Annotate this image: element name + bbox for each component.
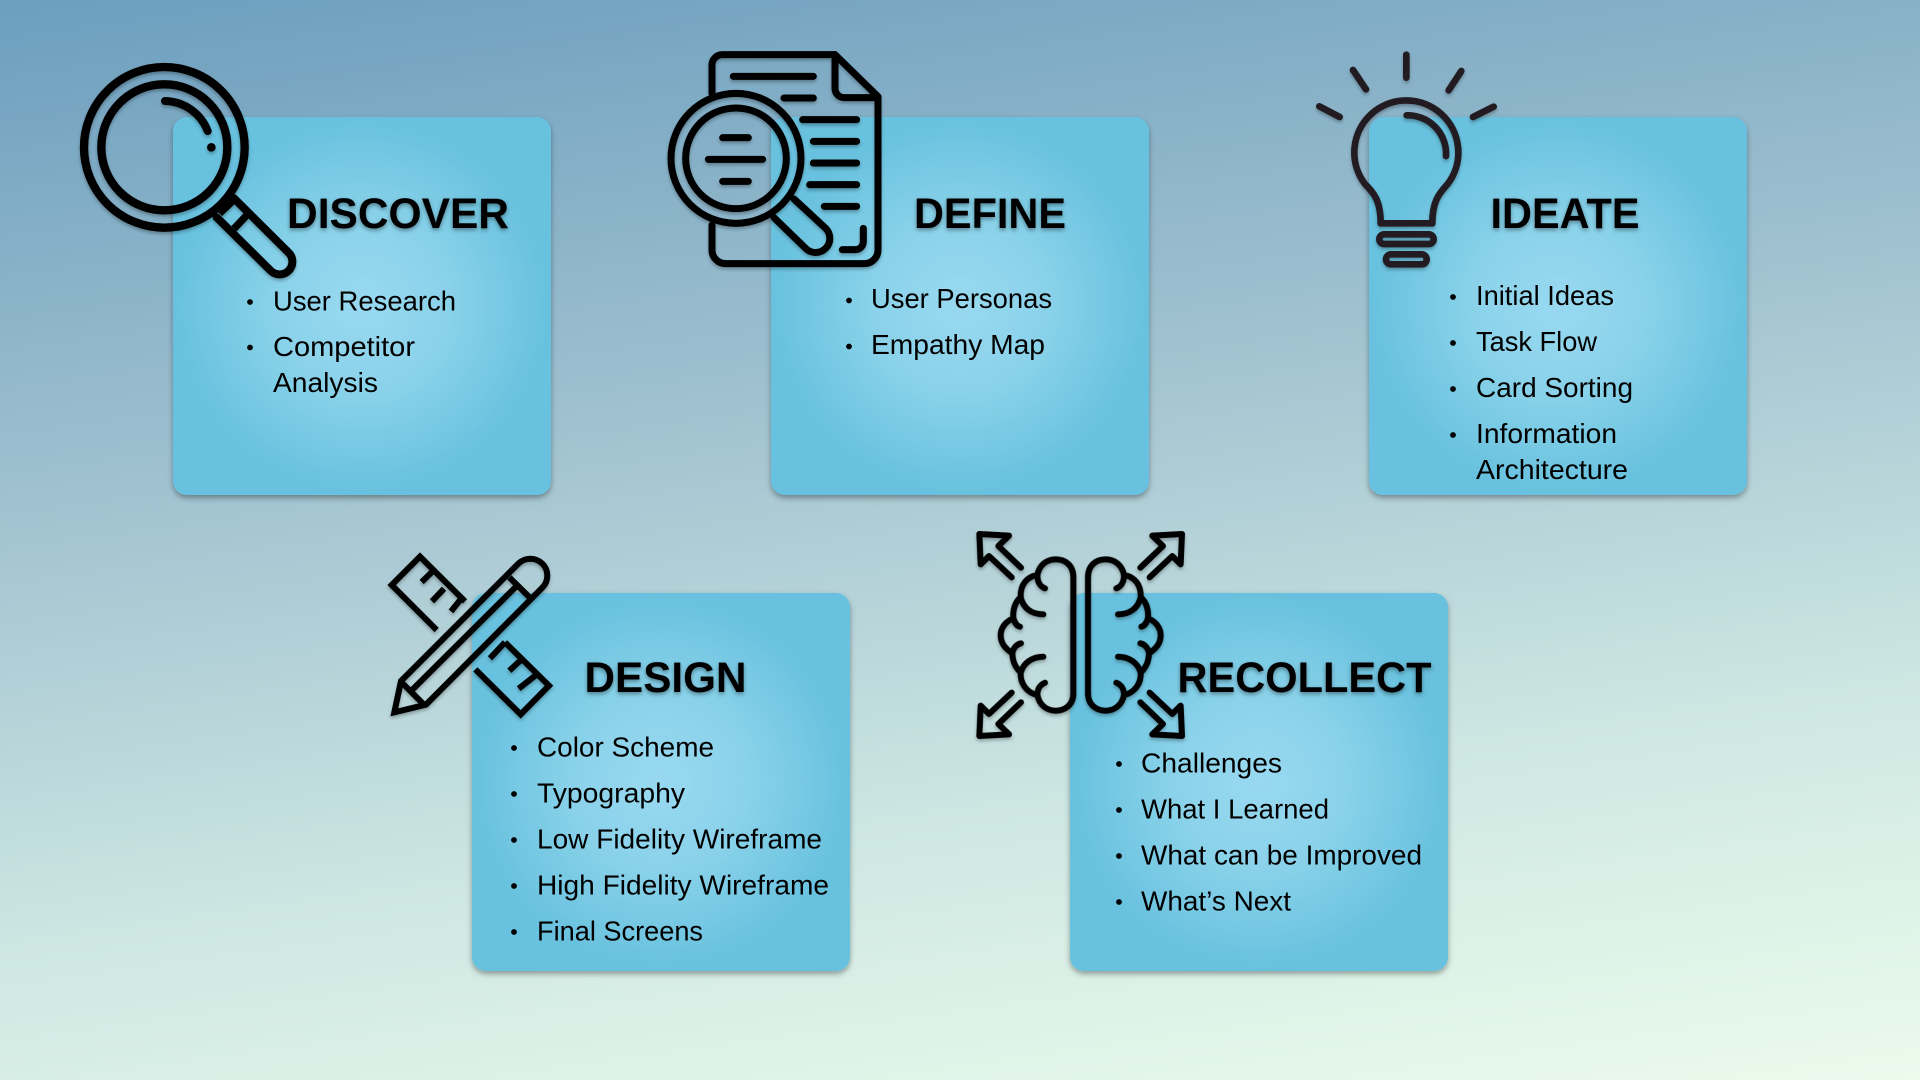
icon: document with magnifier <box>671 55 878 264</box>
panel: define <box>671 55 1149 495</box>
list: design items: High Fidelity Wireframe <box>537 870 829 900</box>
list: discover items: User Research <box>273 286 456 316</box>
list: ideate items <box>1450 280 1633 485</box>
card: ideate <box>1369 117 1747 495</box>
list: design items <box>511 732 829 946</box>
heading: discover: DISCOVER <box>287 190 509 238</box>
panel: design <box>392 557 850 971</box>
list: recollect items <box>1116 748 1422 916</box>
heading: recollect: RECOLLECT <box>1178 654 1432 702</box>
list: define items: User Personas <box>871 283 1052 314</box>
heading: define: DEFINE <box>914 190 1066 238</box>
panel: discover <box>84 67 551 495</box>
heading: ideate: IDEATE <box>1490 190 1640 238</box>
list: discover items: Competitor <box>273 331 415 362</box>
list: ideate items: Information <box>1476 418 1617 449</box>
heading: design: DESIGN <box>584 654 746 702</box>
icon: brain with arrows <box>979 534 1182 736</box>
list: define items: Empathy Map <box>871 329 1045 360</box>
list: ideate items: Card Sorting <box>1476 372 1633 403</box>
icon: magnifying glass <box>84 67 292 274</box>
card: recollect <box>1070 593 1448 971</box>
icon: light bulb <box>1319 55 1494 264</box>
list: discover items <box>247 286 456 398</box>
icon: pencil and ruler <box>392 557 549 714</box>
list: ideate items: Architecture <box>1476 454 1628 485</box>
list: define items <box>846 283 1052 360</box>
panel: ideate <box>1319 55 1747 495</box>
list: ideate items: Task Flow <box>1476 326 1598 357</box>
list: design items: Final Screens <box>537 916 703 946</box>
panel: recollect <box>979 534 1448 971</box>
list: ideate items: Initial Ideas <box>1476 280 1614 311</box>
card: discover <box>173 117 551 495</box>
card: define <box>771 117 1149 495</box>
list: recollect items: What’s Next <box>1141 886 1291 916</box>
list: recollect items: What I Learned <box>1141 794 1329 824</box>
list: recollect items: What can be Improved <box>1141 840 1422 870</box>
list: design items: Low Fidelity Wireframe <box>537 824 822 854</box>
list: design items: Typography <box>537 778 685 808</box>
list: recollect items: Challenges <box>1141 748 1282 778</box>
list: design items: Color Scheme <box>537 732 714 762</box>
list: discover items: Analysis <box>273 367 378 398</box>
card: design <box>472 593 850 971</box>
